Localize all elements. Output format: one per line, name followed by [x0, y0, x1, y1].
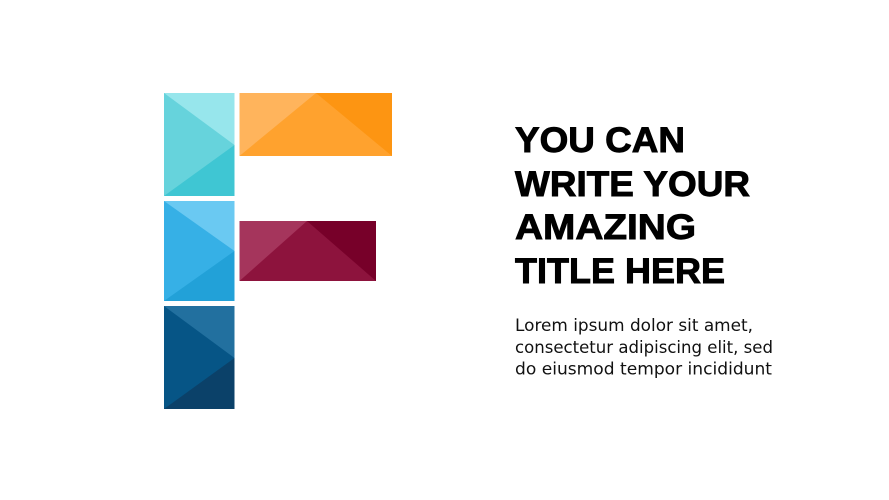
- letter F graphic: [164, 93, 392, 409]
- title: TITLE HERE: [515, 252, 725, 291]
- block: orange top arm: [240, 93, 392, 156]
- title: WRITE YOUR: [515, 165, 750, 204]
- title: [515, 121, 750, 291]
- block: maroon middle arm: [240, 221, 376, 281]
- body text: consectetur adipiscing elit, sed: [515, 338, 773, 358]
- block: navy bottom of stem: [164, 306, 234, 409]
- body text: do eiusmod tempor incididunt: [515, 360, 772, 380]
- block: teal top of stem: [164, 93, 234, 196]
- body text: [515, 316, 773, 380]
- body text: Lorem ipsum dolor sit amet,: [515, 316, 753, 336]
- title: YOU CAN: [515, 121, 685, 160]
- title: AMAZING: [515, 208, 696, 247]
- block: blue middle of stem: [164, 201, 234, 301]
